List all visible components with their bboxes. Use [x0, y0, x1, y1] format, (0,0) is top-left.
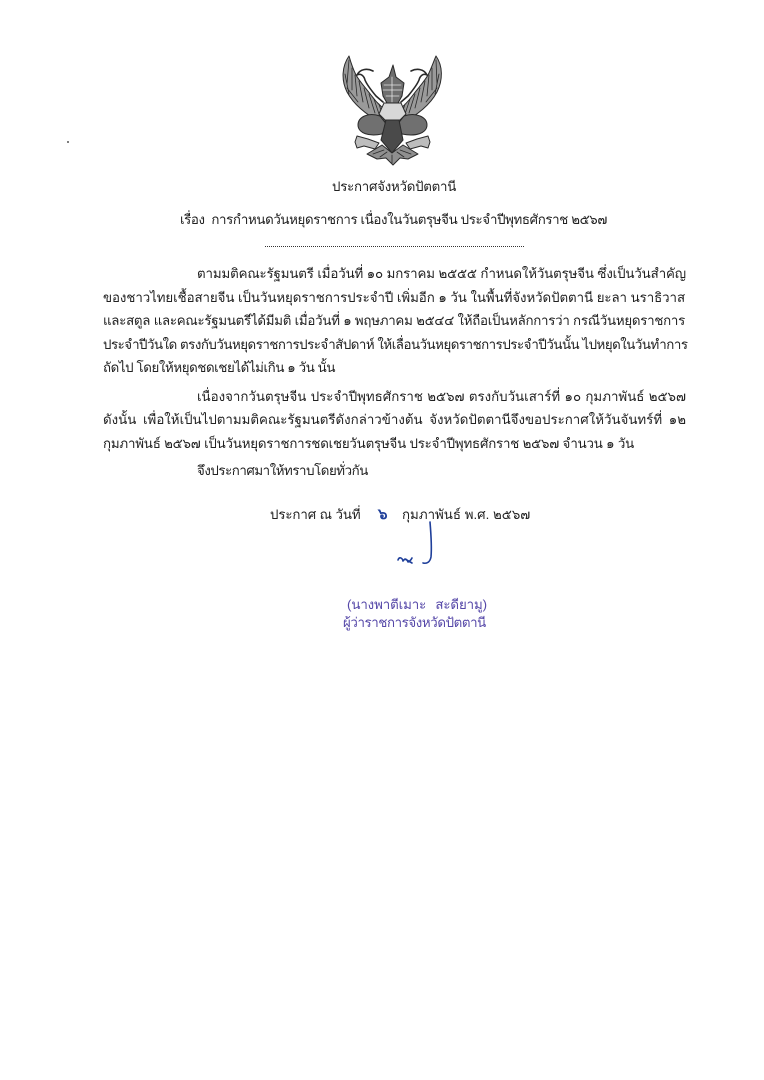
- talons: [355, 136, 430, 149]
- text block: paragraph 1: ถัดไป โดยให้หยุดชดเชยได้ไม่เกิน ๑ วัน นั้น: [103, 360, 335, 375]
- subject heading: เรื่อง การกำหนดวันหยุดราชการ เนื่องในวันตรุษจีน ประจำปีพุทธศักราช ๒๕๖๗: [180, 212, 607, 227]
- naga hooks and arms: [357, 69, 427, 102]
- torso: [379, 103, 406, 120]
- dotted divider: [265, 246, 524, 247]
- handwritten day number: ๖: [378, 506, 388, 523]
- text block: paragraph 1: ของชาวไทยเชื้อสายจีน เป็นวันหยุดราชการประจำปี เพิ่มอีก ๑ วัน ในพื้นที่จังหวัดปัตตานี ยะลา นราธิวาส: [103, 290, 685, 305]
- right wing: [396, 56, 441, 124]
- tail fan: [367, 145, 418, 165]
- icon: Garuda emblem: [342, 56, 442, 166]
- thigh coils: [358, 115, 427, 135]
- text block: paragraph 1: และสตูล และคณะรัฐมนตรีได้มีมติ เมื่อวันที่ ๑ พฤษภาคม ๒๕๔๔ ให้ถือเป็นหลักการว่า กรณีวันหยุดราชการ: [103, 313, 685, 328]
- text block: paragraph 1: ประจำปีวันใด ตรงกับวันหยุดราชการประจำสัปดาห์ ให้เลื่อนวันหยุดราชการประจำปีวันนั้น ไปหยุดในวันทำการ: [103, 337, 688, 352]
- signatory name: (นางพาตีเมาะ สะดียามู): [347, 597, 487, 612]
- text block: closing line: จึงประกาศมาให้ทราบโดยทั่วกัน: [197, 463, 368, 478]
- date line: กุมภาพันธ์ พ.ศ. ๒๕๖๗: [402, 507, 530, 522]
- left wing: [343, 56, 388, 124]
- text block: paragraph 1: ตามมติคณะรัฐมนตรี เมื่อวันที่ ๑๐ มกราคม ๒๕๕๕ กำหนดให้วันตรุษจีน ซึ่งเป็นวันสำคัญ: [197, 266, 686, 281]
- handwritten signature: [397, 521, 432, 564]
- text block: paragraph 2: กุมภาพันธ์ ๒๕๖๗ เป็นวันหยุดราชการชดเชยวันตรุษจีน ประจำปีพุทธศักราช ๒๕๖๗ จำนวน ๑ วัน: [103, 436, 634, 451]
- text block: paragraph 2: ดังนั้น เพื่อให้เป็นไปตามมติคณะรัฐมนตรีดังกล่าวข้างต้น จังหวัดปัตตานีจึงขอประกาศให้วันจันทร์ที่ ๑๒: [103, 412, 686, 427]
- body: [381, 120, 403, 153]
- text block: paragraph 2: เนื่องจากวันตรุษจีน ประจำปีพุทธศักราช ๒๕๖๗ ตรงกับวันเสาร์ที่ ๑๐ กุมภาพันธ์ ๒๕๖๗: [197, 389, 686, 404]
- date line: ประกาศ ณ วันที่: [270, 507, 361, 522]
- speck: [67, 141, 69, 143]
- title: ประกาศจังหวัดปัตตานี: [332, 179, 456, 194]
- text block: paragraph 2: [103, 387, 686, 452]
- crown and head: [381, 65, 404, 103]
- date line: [270, 505, 530, 523]
- signatory title: ผู้ว่าราชการจังหวัดปัตตานี: [343, 615, 486, 630]
- text block: paragraph 1: [103, 264, 688, 376]
